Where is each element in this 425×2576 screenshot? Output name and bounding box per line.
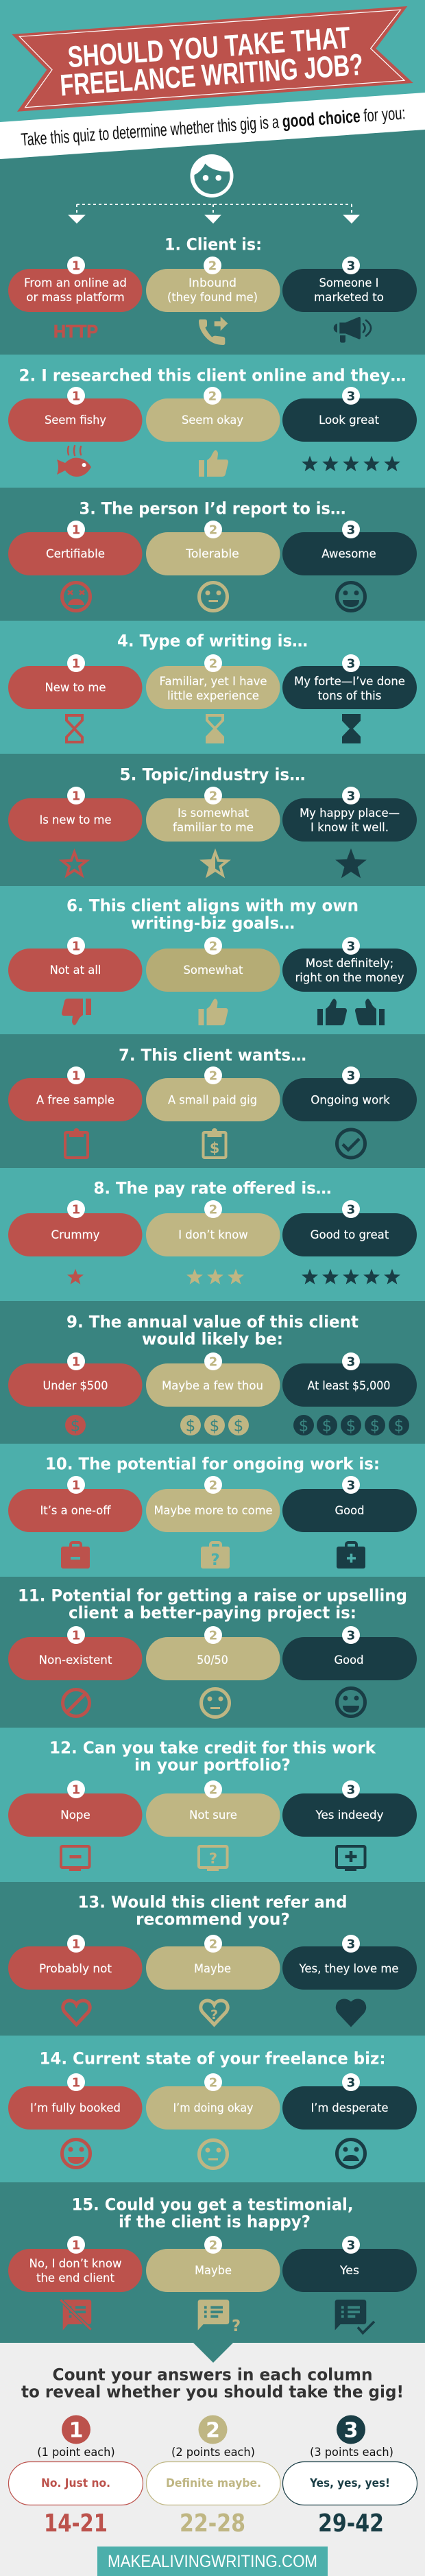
option 1	[8, 1476, 143, 1532]
option 2	[146, 257, 280, 312]
option 3: Good	[335, 1504, 365, 1518]
option 1: 1	[72, 2075, 80, 2090]
option 2: Tolerable	[185, 547, 239, 561]
heading: scoring instructions	[21, 2365, 404, 2402]
score column 1	[8, 2416, 143, 2538]
option 1: 1	[72, 1628, 80, 1643]
option 2: 2	[209, 1937, 217, 1952]
option 2: 2	[209, 1355, 217, 1369]
score column 2	[147, 2416, 280, 2538]
option 1: Is new to me	[40, 813, 111, 827]
option 1: 1	[72, 1203, 80, 1217]
panel: section 5	[0, 754, 425, 886]
option 3	[282, 387, 417, 442]
heading: question 9	[66, 1313, 359, 1348]
icon: thumb up	[199, 450, 228, 477]
option 3	[282, 1780, 417, 1837]
option 2: 2	[209, 2239, 217, 2252]
option 3: 3	[347, 523, 355, 538]
subtitle band	[0, 93, 425, 159]
option 1	[8, 1066, 143, 1121]
heading: question 6: 6. This client aligns with my own	[66, 896, 359, 915]
option 1: 1	[72, 657, 80, 671]
icon: writer face	[191, 154, 233, 198]
icon: five stars	[302, 1269, 400, 1285]
heading: question 13: recommend you?	[136, 1909, 290, 1929]
icon: five coins: $	[394, 1417, 404, 1435]
option 1	[8, 787, 143, 842]
option 1: 1	[72, 1937, 80, 1952]
option 1	[8, 2236, 143, 2292]
option 2: 2	[209, 2075, 217, 2090]
option 3	[282, 654, 417, 709]
icon: sad face	[337, 2140, 365, 2167]
pointer triangle	[193, 2343, 233, 2363]
icon: thumb up	[199, 999, 228, 1025]
heading: question 9: would likely be:	[142, 1329, 283, 1348]
option 3: 3	[347, 2075, 355, 2090]
panel: section 9	[0, 1301, 425, 1444]
heading: question 12: in your portfolio?	[134, 1756, 291, 1775]
heading: question 15: if the client is happy?	[119, 2213, 311, 2232]
icon: hourglass empty	[65, 714, 84, 743]
title banner	[12, 6, 413, 112]
panel: section 13	[0, 1882, 425, 2036]
score column 3: 29-42	[318, 2509, 384, 2538]
option 1: Under $500	[42, 1379, 108, 1393]
icon: five coins: $	[346, 1417, 356, 1435]
option 3: At least $5,000	[307, 1379, 391, 1393]
heading: question 4: 4. Type of writing is…	[117, 631, 308, 650]
option 2: Somewhat	[184, 964, 243, 977]
icon: neutral face	[202, 1689, 229, 1717]
panel: section 4	[0, 621, 425, 754]
option 1	[8, 1626, 143, 1680]
panel: section 1	[0, 93, 425, 355]
option 2: Maybe	[194, 1962, 231, 1976]
heading: question 8: 8. The pay rate offered is…	[93, 1178, 332, 1197]
option 3: 3	[347, 1069, 355, 1084]
icon: happy face	[62, 2140, 90, 2167]
option 2: 2	[209, 1069, 217, 1084]
option 1: Not at all	[49, 964, 101, 977]
option 1: From an online ad	[24, 276, 127, 290]
option 3: Ongoing work	[311, 1093, 390, 1107]
option 3: Awesome	[321, 547, 376, 561]
option 1: 1	[72, 1479, 80, 1492]
option 3	[282, 1476, 417, 1532]
option 1: 1	[72, 789, 80, 804]
icon: HTTP: HTTP	[53, 321, 98, 342]
icon: happy face	[337, 583, 365, 610]
icon: half star	[199, 848, 231, 878]
option 2	[146, 1626, 280, 1680]
option 3: 3	[347, 1479, 355, 1492]
option 1	[8, 1352, 143, 1407]
option 1: No, I don’t know	[29, 2257, 122, 2271]
option 1	[8, 1780, 143, 1837]
panel: section 15	[0, 2182, 425, 2343]
icon: briefcase minus	[61, 1542, 90, 1569]
option 3	[282, 1626, 417, 1680]
icon: testimonial check	[335, 2300, 374, 2333]
icon: check circle	[337, 1130, 365, 1158]
option 3: 3	[347, 2239, 355, 2252]
option 3: Yes indeedy	[315, 1809, 384, 1822]
heading: question 11	[18, 1586, 407, 1623]
option 3: My forte—I’ve done	[294, 675, 405, 689]
panel: section 8	[0, 1168, 425, 1301]
icon: three stars	[186, 1269, 244, 1285]
subtitle band: Take this quiz to determine whether this gig is a	[21, 111, 280, 150]
option 1: 1	[72, 1069, 80, 1084]
option 1: I’m fully booked	[30, 2101, 121, 2115]
heading: question 15	[71, 2195, 354, 2232]
heading: question 6: writing-biz goals…	[131, 914, 295, 933]
option 2: 2	[208, 390, 217, 403]
heading: question 1: 1. Client is:	[165, 235, 262, 254]
heading: question 15: 15. Could you get a testimonial,	[71, 2195, 354, 2214]
option 3: I’m desperate	[311, 2101, 388, 2115]
option 3: 3	[347, 789, 355, 804]
heading: question 14: 14. Current state of your freelance biz:	[40, 2049, 385, 2068]
option 3: Someone I	[319, 276, 378, 290]
option 2: Maybe	[195, 2264, 232, 2278]
option 1	[8, 654, 143, 709]
option 2: little experience	[167, 689, 259, 703]
option 1: the end client	[36, 2271, 114, 2285]
score column 3: 3	[344, 2418, 358, 2443]
option 1: A free sample	[36, 1093, 114, 1107]
option 3	[282, 1066, 417, 1121]
option 2	[146, 1780, 280, 1837]
icon: monitor minus	[61, 1846, 89, 1871]
icon: happy face	[337, 1689, 365, 1716]
heading: question 6	[66, 896, 359, 933]
option 1: Certifiable	[46, 547, 105, 561]
score column 3	[282, 2416, 417, 2538]
option 3: Yes	[339, 2264, 359, 2278]
icon: monitor question: ?	[209, 1850, 217, 1867]
icon: five coins: $	[322, 1417, 332, 1435]
icon: neutral face	[199, 2140, 228, 2169]
option 1: or mass platform	[26, 291, 125, 305]
option 2: (they found me)	[167, 291, 258, 305]
panel: section 12	[0, 1728, 425, 1882]
icon: no sign	[63, 1690, 89, 1716]
option 1: 1	[72, 1783, 80, 1797]
website badge	[97, 2547, 328, 2576]
option 2	[146, 2073, 280, 2130]
option 3: I know it well.	[311, 821, 389, 835]
icon: five coins	[293, 1415, 409, 1435]
option 3	[282, 2236, 417, 2292]
option 3: Most definitely;	[306, 957, 393, 970]
heading: question 13: 13. Would this client refer and	[78, 1893, 347, 1912]
option 3: 3	[347, 1203, 355, 1217]
option 1	[8, 521, 143, 575]
option 2: Maybe more to come	[154, 1504, 273, 1518]
option 3: 3	[347, 1937, 355, 1952]
panel: section 11	[0, 1577, 425, 1728]
icon: one star	[67, 1269, 84, 1285]
panel: section 2	[0, 355, 425, 488]
heading: question 12: 12. Can you take credit for this work	[49, 1738, 376, 1757]
website badge: MAKEALIVINGWRITING.COM	[108, 2552, 317, 2571]
arrows: dotted branches to three columns	[68, 204, 360, 224]
icon: monitor plus	[337, 1846, 365, 1871]
icon: five coins: $	[370, 1417, 380, 1435]
option 2	[146, 1935, 280, 1990]
heading: question 9: 9. The annual value of this client	[66, 1313, 359, 1332]
heading: question 3: 3. The person I’d report to is…	[80, 499, 345, 518]
panel: scoring footer	[0, 2343, 425, 2576]
option 3: 3	[347, 657, 355, 671]
option 3: right on the money	[295, 971, 404, 985]
icon: briefcase question	[201, 1542, 230, 1569]
option 2: Seem okay	[182, 414, 243, 427]
option 2	[146, 521, 280, 575]
option 1	[8, 387, 143, 442]
option 2: I don’t know	[178, 1228, 248, 1242]
option 2	[146, 1476, 280, 1532]
score column 1: (1 point each)	[37, 2446, 115, 2459]
icon: testimonial crossed out	[60, 2300, 91, 2330]
score column 2: (2 points each)	[171, 2446, 255, 2459]
heading: scoring instructions: Count your answers in each column	[52, 2365, 373, 2384]
icon: five coins: $	[299, 1417, 308, 1435]
option 2: familiar to me	[173, 821, 254, 835]
icon: full star	[335, 848, 367, 878]
option 1: Seem fishy	[45, 414, 106, 427]
option 2: Familiar, yet I have	[159, 675, 267, 689]
option 2: 50/50	[197, 1654, 228, 1667]
panel: section 6	[0, 886, 425, 1034]
option 2	[146, 1066, 280, 1121]
option 2	[146, 787, 280, 842]
icon: testimonial question: ?	[232, 2317, 241, 2335]
option 2	[146, 2236, 280, 2292]
option 1: 1	[72, 2239, 80, 2252]
option 2: Is somewhat	[178, 807, 249, 820]
icon: paid clipboard: $	[210, 1140, 219, 1156]
option 1: 1	[72, 259, 80, 273]
option 3: Good to great	[311, 1228, 389, 1242]
score column 1: 1	[69, 2418, 83, 2443]
title text	[57, 20, 364, 103]
option 2: 2	[209, 523, 217, 538]
option 3: My happy place—	[300, 807, 400, 820]
option 3: 3	[347, 1783, 355, 1797]
option 3: marketed to	[314, 291, 384, 305]
icon: inbound phone	[199, 317, 228, 345]
icon: heart outline	[63, 2001, 90, 2025]
option 3	[282, 1200, 417, 1256]
option 1: Nope	[60, 1809, 90, 1822]
option 1: Probably not	[39, 1962, 112, 1976]
option 2: 2	[209, 1628, 217, 1643]
option 2: 2	[209, 789, 217, 804]
icon: two thumbs up	[317, 999, 385, 1025]
icon: three coins: $	[234, 1417, 243, 1435]
option 1: 1	[72, 1355, 80, 1369]
panel: section 10	[0, 1444, 425, 1577]
icon: dead face	[62, 583, 90, 610]
option 1: It’s a one-off	[40, 1504, 112, 1518]
option 2	[146, 1352, 280, 1407]
heading: question 7: 7. This client wants…	[119, 1045, 306, 1064]
option 3: 3	[347, 259, 355, 273]
option 1	[8, 2073, 143, 2130]
icon: thumb down	[62, 999, 91, 1025]
heading: question 10: 10. The potential for ongoing work is:	[45, 1454, 380, 1473]
option 3: 3	[347, 390, 355, 403]
option 3: Good	[335, 1654, 363, 1667]
heading: question 13	[78, 1893, 347, 1929]
icon: blank clipboard	[65, 1128, 88, 1158]
icon: one coin: $	[71, 1417, 80, 1435]
option 3	[282, 257, 417, 312]
subtitle band: good choice	[282, 106, 361, 132]
icon: three coins	[180, 1415, 249, 1435]
option 2: 2	[209, 1203, 217, 1217]
option 1: Crummy	[51, 1228, 100, 1242]
option 3	[282, 521, 417, 575]
option 3	[282, 937, 417, 992]
score column 1: 14-21	[44, 2509, 108, 2538]
option 3	[282, 1935, 417, 1990]
option 2: 2	[209, 940, 217, 953]
icon: monitor question	[199, 1846, 228, 1871]
option 1: Non-existent	[38, 1654, 112, 1667]
icon: heart full	[337, 2001, 365, 2025]
score column 2: 22-28	[180, 2509, 245, 2538]
score column 2: Definite maybe.	[166, 2477, 261, 2490]
option 1: 1	[72, 390, 80, 403]
option 1	[8, 937, 143, 992]
icon: star outline	[59, 848, 90, 878]
icon: three coins: $	[210, 1417, 219, 1435]
option 3: Yes, they love me	[299, 1962, 399, 1976]
option 3	[282, 2073, 417, 2130]
option 2: 2	[209, 1479, 217, 1492]
option 3: 3	[347, 1355, 355, 1369]
option 2: Maybe a few thou	[162, 1379, 263, 1393]
option 1: 1	[72, 523, 80, 538]
heading: scoring instructions: to reveal whether you should take the gig!	[21, 2383, 404, 2402]
subtitle band: for you:	[363, 102, 406, 126]
option 3: 3	[347, 940, 355, 953]
option 2: Inbound	[189, 276, 236, 290]
score column 3: (3 points each)	[310, 2446, 393, 2459]
option 2	[146, 387, 280, 442]
option 3: Look great	[319, 414, 379, 427]
icon: heart question	[201, 2001, 228, 2025]
option 2: 2	[209, 1783, 217, 1797]
heading: question 2: 2. I researched this client online and they…	[19, 366, 406, 385]
option 3: tons of this	[318, 689, 382, 703]
option 2: 2	[208, 259, 217, 273]
icon: paid clipboard	[203, 1128, 226, 1158]
icon: briefcase question: ?	[210, 1551, 220, 1569]
option 3: 3	[347, 1628, 355, 1643]
icon: hourglass full	[342, 714, 361, 743]
option 1: 1	[72, 940, 80, 953]
icon: hourglass half	[206, 714, 224, 743]
option 1: New to me	[45, 681, 106, 695]
icon: five stars	[302, 455, 400, 471]
icon: testimonial question	[198, 2300, 241, 2335]
icon: heart question: ?	[210, 2007, 218, 2023]
score column 1: No. Just no.	[41, 2477, 110, 2490]
icon: briefcase plus	[337, 1542, 365, 1569]
option 2: 2	[209, 657, 217, 671]
icon: neutral face	[199, 583, 228, 610]
option 2: Not sure	[189, 1809, 237, 1822]
heading: question 11: 11. Potential for getting a raise or upselling	[18, 1586, 407, 1605]
icon: one coin	[65, 1415, 86, 1435]
option 2: A small paid gig	[168, 1093, 257, 1107]
option 3	[282, 787, 417, 842]
option 3	[282, 1352, 417, 1407]
heading: question 12	[49, 1738, 376, 1775]
option 2: I’m doing okay	[173, 2101, 254, 2115]
score column 3: Yes, yes, yes!	[309, 2477, 390, 2490]
heading: question 5: 5. Topic/industry is…	[119, 765, 306, 785]
icon: megaphone	[334, 317, 371, 343]
panel: section 14	[0, 2036, 425, 2182]
option 2	[146, 654, 280, 709]
option 2	[146, 937, 280, 992]
option 1	[8, 1935, 143, 1990]
score column 2: 2	[206, 2418, 220, 2443]
option 1	[8, 1200, 143, 1256]
panel: section 7	[0, 1034, 425, 1168]
icon: three coins: $	[186, 1417, 195, 1435]
option 1	[8, 257, 143, 312]
icon: smelly fish	[57, 446, 91, 477]
option 2	[146, 1200, 280, 1256]
panel: section 3	[0, 488, 425, 621]
heading: question 11: client a better-paying project is:	[69, 1603, 356, 1623]
